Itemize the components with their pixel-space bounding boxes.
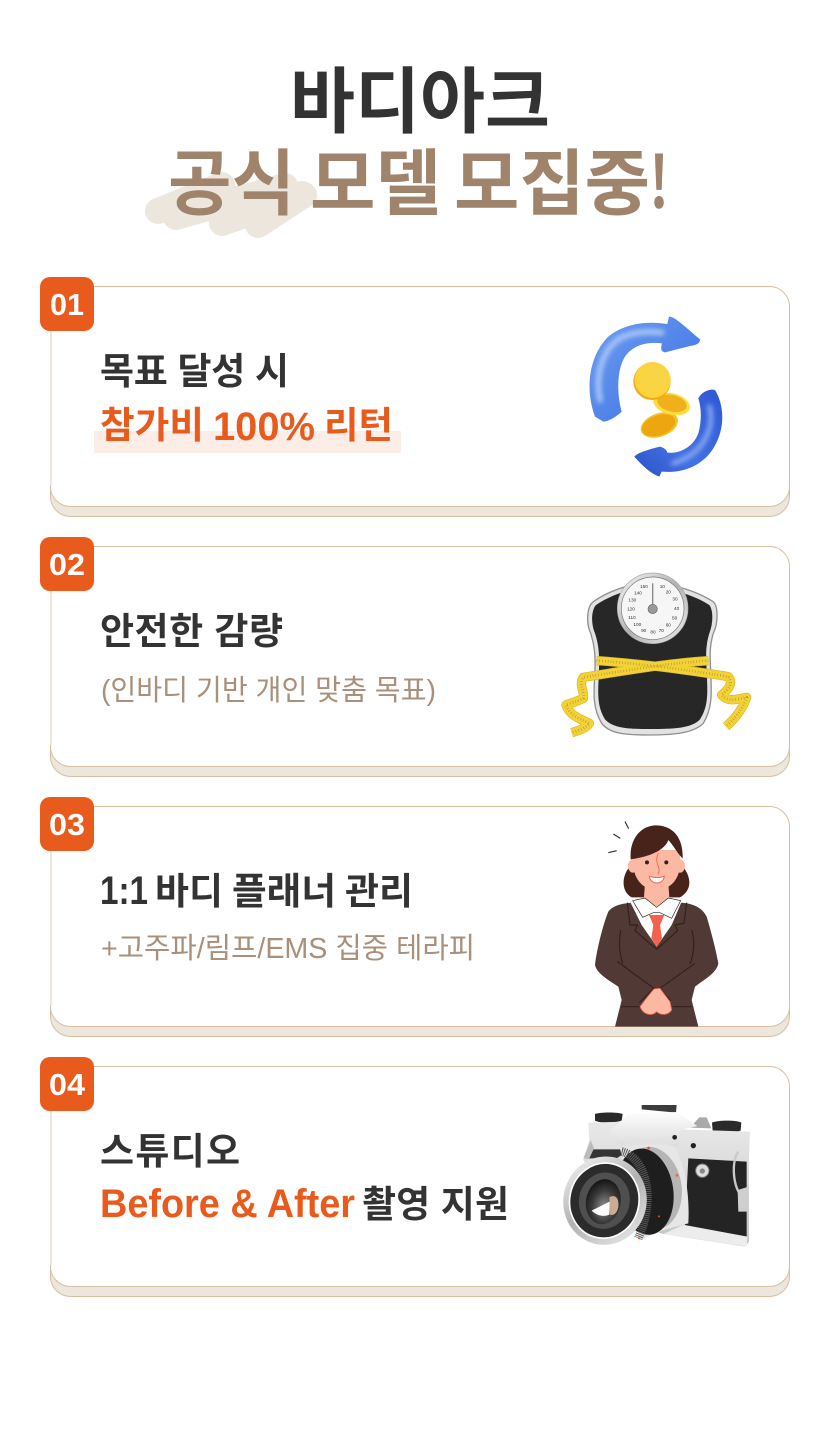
text highlight [94,431,401,453]
prism [610,1112,697,1147]
title brush highlight [158,185,304,225]
panel: 01 participation refund [40,277,790,516]
leatherette [685,1158,747,1237]
title [168,63,669,229]
dial numbers: 30 [672,597,678,602]
dials [595,1112,623,1123]
icon: woman in suit [595,822,718,1027]
heading 01 [100,351,393,449]
panel: 02 safe weight loss [40,537,790,776]
heading 02: 안전한 감량 [100,611,283,652]
dial numbers: 70 [659,628,664,633]
icon: bathroom scale with tape measure [566,573,747,735]
jacket [595,903,718,1027]
dial numbers: 110 [628,615,636,620]
dark band [585,1149,630,1158]
heading 03 [100,869,413,913]
dial numbers: 40 [674,606,680,611]
heading 01: 참가비 [100,405,204,446]
dial numbers: 10 [660,584,665,589]
badge 04 [40,1057,94,1111]
dial numbers: 140 [634,590,642,595]
heading 03: 바디 [155,871,223,912]
dial numbers: 100 [633,622,642,627]
heading 04 [100,1131,509,1226]
icon: camera [555,1105,750,1253]
badge 01 [40,277,94,331]
title: ! [649,124,669,229]
title: 모델 [310,145,441,225]
bangs [631,825,683,859]
back hair [624,865,689,897]
dial numbers: 80 [650,630,656,635]
badge 02: 02 [49,547,85,582]
dial numbers: 130 [628,598,637,603]
subtext 03: +고주파/림프/EMS 집중 테라피 [101,933,475,965]
title: 바디아크 [290,63,550,143]
tie [649,915,664,947]
shirt [630,902,682,947]
neck [644,883,669,907]
face [628,859,638,873]
tape [566,661,747,733]
badge 01: 01 [50,287,84,322]
collar [633,898,681,918]
panel: 04 studio photo [40,1057,790,1296]
dial numbers: 120 [627,606,635,611]
dial numbers: 60 [666,623,671,628]
upper arrow [590,317,700,422]
title: 공식 [168,145,295,225]
dial numbers: 50 [672,616,678,621]
badge 03 [40,797,94,851]
lens barrel [616,1143,687,1234]
subtext 02: (인바디 기반 개인 맞춤 목표) [101,675,436,707]
heading 03: 관리 [345,871,413,912]
heading 01: 리턴 [324,405,393,446]
hands [640,988,672,1014]
lower arrow [634,390,722,477]
heading 01: 100% [213,405,315,449]
badge 04: 04 [49,1067,86,1102]
heading 04: 스튜디오 [100,1131,240,1172]
badge 03: 03 [49,807,85,842]
strap lugs [583,1135,749,1212]
heading 01: 목표 달성 시 [100,351,289,392]
dial numbers: 150 [640,584,648,589]
sparks [608,822,629,853]
silver collar [620,1144,689,1240]
eyes, nose, mouth [645,860,649,864]
dial numbers: 90 [641,628,647,633]
heading 03: 1:1 [100,869,148,913]
badge 02 [40,537,94,591]
coins [637,407,681,443]
lens front [555,1149,655,1253]
dial numbers: 20 [666,590,671,595]
title: 모집중 [454,145,650,225]
heading 04: 촬영 지원 [362,1184,509,1225]
body [583,1122,750,1247]
panel: 03 body planner [40,797,790,1036]
icon: coins with circular arrows [590,317,722,477]
heading 03: 플래너 [232,871,336,912]
lapels and lines [617,903,695,1007]
bottom plate [663,1225,747,1247]
dial numbers [627,584,680,635]
hot shoe [642,1105,677,1113]
heading 04: Before & After [100,1182,355,1226]
